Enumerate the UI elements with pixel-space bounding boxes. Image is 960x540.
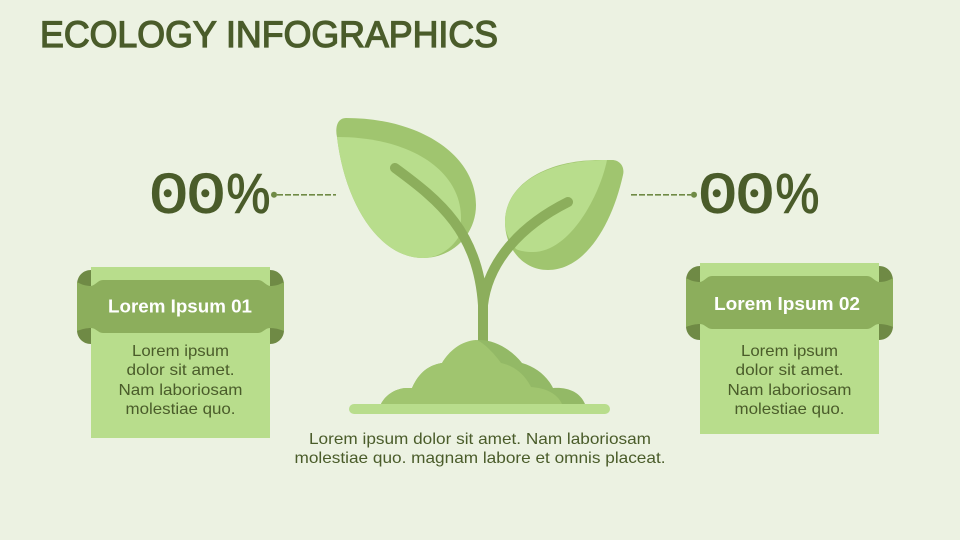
left leaf (336, 118, 476, 258)
ribbon label: Lorem Ipsum 01 (108, 296, 252, 316)
caption (294, 431, 666, 467)
right leaf (505, 160, 623, 270)
card text (728, 343, 852, 418)
panel: left ribbon card (77, 267, 284, 438)
card text: Lorem ipsum (741, 343, 838, 360)
ground bar (349, 404, 610, 414)
panel: right ribbon card (686, 263, 893, 434)
plant illustration (336, 118, 623, 414)
card sheet (91, 267, 270, 438)
card text: molestiae quo. (734, 401, 844, 418)
card text: Nam laboriosam (728, 382, 852, 399)
ribbon end caps (77, 270, 284, 344)
right percentage (699, 163, 819, 225)
card text: Lorem ipsum (132, 343, 229, 360)
ribbon end caps (686, 266, 893, 340)
right percentage: % (776, 163, 819, 225)
card text: molestiae quo. (126, 401, 236, 418)
soil mound (381, 340, 585, 404)
caption: molestiae quo. magnam labore et omnis placeat. (294, 450, 666, 467)
left percentage (150, 163, 270, 225)
stems (395, 168, 568, 345)
card text: dolor sit amet. (126, 362, 234, 379)
left percentage: 00 (150, 163, 225, 225)
card sheet (700, 263, 879, 434)
right connector (631, 192, 697, 198)
ribbon band (686, 276, 893, 329)
ribbon band (77, 280, 284, 333)
card text: dolor sit amet. (736, 362, 844, 379)
title: ECOLOGY INFOGRAPHICS (40, 14, 498, 55)
caption: Lorem ipsum dolor sit amet. Nam laboriosam (309, 431, 651, 448)
card text: Nam laboriosam (118, 382, 242, 399)
ribbon label: Lorem Ipsum 02 (714, 294, 860, 314)
left percentage: % (226, 163, 270, 225)
card text (118, 343, 242, 418)
right percentage: 00 (699, 163, 774, 225)
left connector (271, 192, 336, 198)
